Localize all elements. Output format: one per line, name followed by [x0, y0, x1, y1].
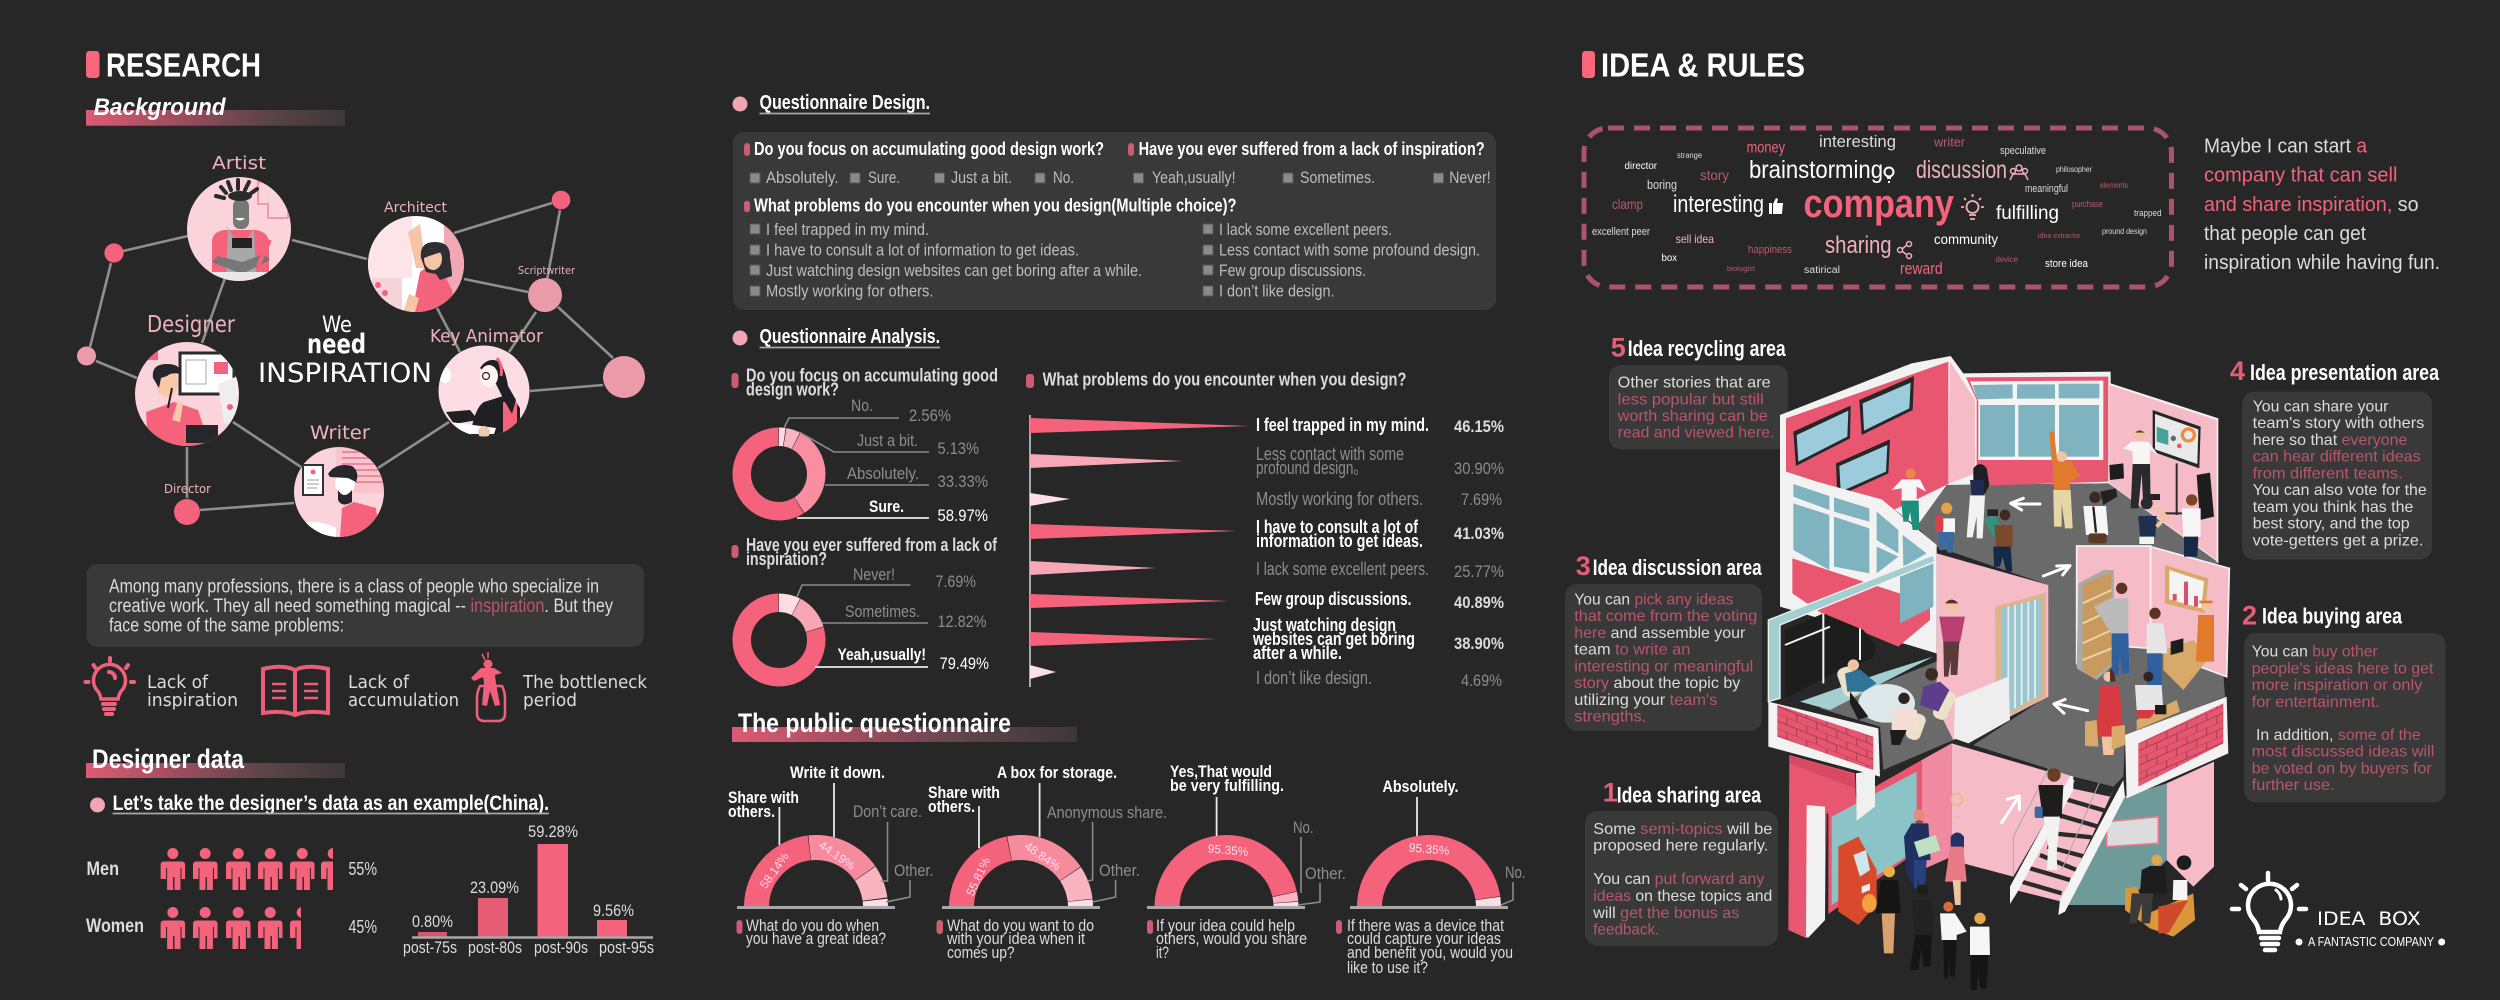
chart: design problems funnel bars: websites can get boring: [1252, 629, 1415, 649]
chart: donut lack of inspiration: Sometimes.: [845, 602, 920, 621]
callout: idea buying area: be voted on by buyers for: [2252, 760, 2432, 778]
icon: thumbs up: [1769, 198, 1783, 214]
people: [1845, 430, 2214, 990]
callout: idea sharing area: Idea sharing area: [1617, 782, 1762, 807]
chart: donut lack of inspiration: Yeah,usually!: [838, 645, 926, 664]
word cloud: director: [1624, 161, 1658, 172]
chart: donut lack of inspiration: inspiration?: [746, 549, 827, 569]
callout: idea presentation area: vote-getters get a prize.: [2253, 532, 2423, 549]
heading: questionnaire design: Questionnaire Design.: [760, 92, 930, 114]
chart: gender pictogram: 45%: [348, 917, 377, 937]
panel: questionnaire questions: Few group discussions.: [1219, 261, 1366, 280]
panel: questionnaire questions: [733, 132, 1496, 310]
word cloud: reward: [1900, 259, 1943, 278]
word cloud: idea extractor: [2038, 233, 2081, 240]
panel: questionnaire questions: Less contact with some profound design.: [1219, 241, 1480, 260]
callout: idea presentation area: You can share your: [2253, 398, 2389, 415]
staircase: [2010, 715, 2125, 915]
icon: light bulb: [86, 658, 134, 714]
label: lack of accumulation: accumulation: [348, 690, 459, 711]
callout: idea recycling area: read and viewed here.: [1618, 425, 1774, 442]
heading: designer data: [86, 744, 345, 778]
heading: idea and rules: IDEA & RULES: [1601, 47, 1805, 84]
callout: idea recycling area: Idea recycling area: [1628, 336, 1786, 361]
callout: idea recycling area: Other stories that are: [1618, 374, 1771, 391]
node: scriptwriter: [528, 278, 562, 312]
word cloud: boring: [1647, 177, 1677, 192]
label: the bottleneck period: The bottleneck: [522, 672, 648, 693]
callout: idea recycling area: less popular but still: [1618, 392, 1764, 408]
center text: we need inspiration: INSPIRATION: [258, 358, 432, 389]
label: designer: Designer: [147, 312, 235, 338]
chart: design problems funnel bars: 7.69%: [1461, 490, 1502, 509]
callout: idea discussion area: interesting or meaningful: [1574, 658, 1753, 675]
panel: questionnaire questions: I feel trapped in my mind.: [766, 220, 929, 239]
chart: design problems funnel bars: 41.03%: [1454, 524, 1504, 543]
callout: idea buying area: most discussed ideas will: [2252, 744, 2434, 761]
label: scriptwriter: Scriptwriter: [518, 264, 575, 277]
callout: idea buying area: [2242, 600, 2446, 802]
label: lack of inspiration: Lack of: [147, 672, 209, 693]
word cloud: strange: [1677, 151, 1703, 160]
callout: idea recycling area: 5: [1611, 333, 1626, 363]
ground floor walls: [1788, 743, 2214, 938]
label: lack of inspiration: [147, 672, 238, 711]
portrait: designer: [135, 342, 239, 446]
word cloud: discussion: [1916, 156, 2007, 184]
panel: questionnaire questions: Just watching design websites can get boring after a while.: [766, 261, 1142, 280]
word cloud: sharing: [1825, 232, 1892, 259]
callout: idea buying area: for entertainment.: [2252, 694, 2380, 711]
panel: questionnaire questions: Sometimes.: [1300, 168, 1375, 187]
chart: donut accumulating design work: 58.97%: [938, 506, 988, 525]
word cloud: community: [1934, 231, 1998, 247]
callout: idea presentation area: team's story with others: [2253, 415, 2424, 432]
chart: would you use a capture device: Absolutely.: [1382, 777, 1458, 796]
chart: what do you do with a great idea: Write it down.: [790, 763, 885, 782]
chart: design problems funnel bars: Just watching design: [1253, 615, 1396, 635]
text block: intro: Among many professions, there is a class of people who specialize in: [109, 577, 599, 598]
right shop room: [2077, 546, 2229, 730]
chart: would you share your idea: [1147, 762, 1346, 966]
word cloud: company: [1804, 182, 1955, 226]
chart: design problems funnel bars: 46.15%: [1454, 417, 1504, 436]
chart: design problems funnel bars: Less contact with some: [1256, 444, 1404, 464]
chart: what do you want to do with your idea: 48.84%: [1022, 839, 1063, 874]
label: the bottleneck period: [522, 672, 648, 711]
heading: designer data: Designer data: [92, 744, 245, 774]
callout: idea discussion area: story about the topic by: [1574, 675, 1740, 692]
left window block and meeting room: [1768, 472, 1993, 770]
label: the bottleneck period: period: [523, 690, 577, 711]
upper floor: [1917, 483, 2225, 787]
panel: questionnaire questions: I have to consult a lot of information to get ideas.: [766, 241, 1079, 260]
callout: idea presentation area: team you think has the: [2253, 499, 2414, 516]
chart: what do you do with a great idea: [728, 763, 934, 966]
chart: age bar chart: post-95s: [599, 938, 654, 957]
word cloud: pround design: [2102, 227, 2147, 236]
chart: would you share your idea: be very fulfilling.: [1170, 776, 1284, 795]
word cloud: store idea: [2045, 258, 2089, 270]
logo: idea box: IDEA BOX: [2317, 908, 2421, 930]
callout: idea presentation area: here so that everyone: [2253, 432, 2407, 449]
chart: design problems funnel bars: What problems do you encounter when you design?: [1043, 370, 1406, 390]
chart: donut lack of inspiration: [732, 535, 998, 677]
chart: age bar chart: 9.56%: [593, 901, 634, 920]
chart: would you use a capture device: If there was a device that: [1347, 916, 1504, 935]
panel: questionnaire questions: Never!: [1449, 168, 1491, 187]
chart: what do you do with a great idea: 44.19%: [816, 838, 858, 873]
chart: would you share your idea: Yes,That would: [1170, 762, 1272, 781]
chart: age bar chart: 0.80%: [412, 912, 453, 931]
icon: book: [263, 667, 328, 715]
chart: design problems funnel bars: I don’t like design.: [1256, 668, 1372, 688]
chart: gender pictogram: Women: [86, 916, 144, 937]
word cloud: brainstorming: [1749, 156, 1883, 184]
label: writer: Writer: [310, 422, 370, 444]
chart: gender pictogram: 55%: [348, 859, 377, 879]
icon: person in a bottle: [471, 652, 505, 721]
chart: donut accumulating design work: [732, 366, 998, 525]
word cloud: trapped: [2134, 208, 2162, 218]
label: key animator: Key Animator: [430, 326, 544, 347]
portrait: key animator: [438, 345, 530, 438]
node: top-left dot: [104, 243, 124, 263]
callout: idea presentation area: best story, and the top: [2253, 516, 2410, 533]
chart: what do you want to do with your idea: with your idea when it: [946, 929, 1085, 948]
label: lack of inspiration: inspiration: [147, 690, 238, 711]
callout: idea buying area: In addition, some of the: [2256, 727, 2421, 744]
chart: donut accumulating design work: 33.33%: [938, 472, 988, 491]
panel: questionnaire questions: Sure.: [868, 168, 900, 187]
callout: idea sharing area: feedback.: [1593, 922, 1659, 939]
callout: idea discussion area: Idea discussion area: [1593, 555, 1762, 580]
chart: what do you want to do with your idea: Other.: [1099, 861, 1140, 880]
chart: donut accumulating design work: Just a bit.: [857, 431, 918, 450]
callout: idea presentation area: Idea presentation area: [2250, 360, 2440, 385]
panel: questionnaire column: [728, 92, 1526, 977]
portrait: architect: [368, 216, 464, 312]
word cloud: fulfilling: [1996, 203, 2059, 224]
meeting table: [1835, 665, 1957, 742]
callout: idea discussion area: utilizing your team's: [1574, 692, 1717, 709]
callout: idea discussion area: strengths.: [1574, 709, 1646, 726]
chart: what do you do with a great idea: Don’t care.: [853, 802, 922, 821]
chart: what do you want to do with your idea: Share with: [928, 783, 1000, 802]
callout: idea buying area: people's ideas here to get: [2252, 660, 2434, 678]
heading: questionnaire analysis: Questionnaire Analysis.: [760, 326, 940, 348]
panel: research column: [77, 47, 654, 957]
chart: what do you want to do with your idea: What do you want to do: [947, 916, 1094, 935]
node: top-right dot: [552, 191, 570, 209]
chart: donut lack of inspiration: Have you ever suffered from a lack of: [746, 535, 998, 555]
word cloud: box: [1662, 253, 1677, 264]
chart: what do you do with a great idea: Share with: [728, 788, 799, 807]
text block: company idea: inspiration while having fun.: [2204, 252, 2440, 274]
callout: idea buying area: Idea buying area: [2262, 604, 2403, 629]
chart: donut lack of inspiration: 7.69%: [936, 572, 976, 591]
chart: would you use a capture device: No.: [1505, 863, 1526, 882]
callout: idea presentation area: [2230, 356, 2440, 560]
word cloud: interesting: [1819, 132, 1896, 151]
chart: donut accumulating design work: Absolutely.: [847, 464, 919, 483]
chart: design problems funnel bars: information to get ideas.: [1256, 531, 1423, 551]
chart: design problems funnel bars: 38.90%: [1454, 634, 1504, 653]
chart: would you share your idea: Other.: [1305, 864, 1346, 883]
callout: idea discussion area: [1565, 551, 1762, 731]
word cloud: story: [1700, 167, 1729, 183]
chart: what do you want to do with your idea: [928, 763, 1167, 966]
callout: idea sharing area: proposed here regularly.: [1593, 838, 1768, 855]
label: artist: Artist: [212, 153, 266, 174]
word cloud: device: [1996, 255, 2019, 264]
chart: would you use a capture device: like to use it?: [1347, 958, 1428, 977]
portrait: writer: [294, 447, 384, 538]
word cloud: philosopher: [2056, 165, 2092, 174]
panel: questionnaire questions: I don’t like design.: [1219, 282, 1334, 301]
pink room with curtain: [1937, 553, 2048, 743]
chart: age bar chart: [403, 822, 654, 957]
illustration: isometric idea building: [1768, 356, 2229, 990]
word cloud: speculative: [2000, 145, 2046, 157]
logo: idea box: [2232, 873, 2445, 950]
chart: what do you want to do with your idea: others.: [928, 797, 975, 816]
panel: questionnaire questions: Mostly working for others.: [766, 282, 934, 301]
chart: design problems funnel bars: 25.77%: [1454, 562, 1504, 581]
chart: what do you want to do with your idea: comes up?: [947, 943, 1015, 962]
chart: would you use a capture device: and benefit you, would you: [1347, 943, 1513, 962]
chart: design problems funnel bars: profound design。: [1256, 458, 1367, 478]
sofa: [2125, 887, 2195, 937]
chart: design problems funnel bars: Mostly working for others.: [1256, 489, 1423, 509]
chart: would you share your idea: others, would you share: [1156, 929, 1307, 948]
back wall silhouette: [1780, 356, 2218, 563]
chart: donut accumulating design work: Do you focus on accumulating good: [746, 366, 998, 386]
chart: what do you want to do with your idea: Anonymous share.: [1047, 803, 1167, 822]
subheading: Background: Background: [94, 94, 227, 121]
heading: RESEARCH: RESEARCH: [106, 47, 261, 84]
callout: idea sharing area: ideas on these topics and: [1593, 888, 1772, 905]
callout: idea discussion area: You can pick any ideas: [1574, 592, 1733, 608]
portrait: artist: [187, 177, 291, 282]
callout: idea discussion area: 3: [1576, 551, 1591, 581]
text block: company idea: and share inspiration, so: [2204, 194, 2419, 216]
chart: donut lack of inspiration: Never!: [853, 565, 895, 584]
chart: what do you do with a great idea: What do you do when: [746, 916, 879, 935]
chart: age bar chart: post-75s: [403, 938, 457, 957]
chart: gender pictogram: [86, 848, 377, 949]
chart: would you share your idea: 95.35%: [1207, 841, 1249, 859]
callout: idea sharing area: Some semi-topics will be: [1593, 821, 1772, 838]
network diagram of creative professions: [77, 153, 645, 538]
back window wall: [1966, 377, 2108, 486]
text block: company idea: [2204, 136, 2440, 274]
icon: mini people: [2010, 165, 2028, 180]
word cloud: elements: [2100, 181, 2128, 190]
label: lack of accumulation: Lack of: [348, 672, 410, 693]
chart: design problems funnel bars: 30.90%: [1454, 459, 1504, 478]
label: lack of accumulation: [348, 672, 459, 711]
callout: idea discussion area: team to write an: [1574, 642, 1690, 659]
red wall with monitors: [1786, 362, 1975, 510]
callout: idea buying area: 2: [2242, 600, 2257, 630]
chart: design problems funnel bars: I have to consult a lot of: [1256, 517, 1419, 537]
word cloud: meaningful: [2025, 183, 2068, 195]
label: director: Director: [164, 482, 211, 496]
chart: would you share your idea: No.: [1293, 818, 1314, 837]
chart: age bar chart: 59.28%: [528, 822, 578, 841]
callout: idea discussion area: here and assemble your: [1574, 625, 1746, 642]
chart: design problems funnel bars: I feel trapped in my mind.: [1256, 415, 1429, 435]
chart: age bar chart: post-90s: [534, 938, 588, 957]
word cloud: purchase: [2072, 199, 2103, 209]
icon: company bulb: [1961, 194, 1984, 219]
text block: company idea: Maybe I can start a: [2204, 136, 2368, 158]
icon: share: [1898, 242, 1912, 258]
text block: intro: face some of the same problems:: [109, 616, 344, 637]
chart: gender pictogram: Men: [86, 859, 119, 880]
node: left dot: [77, 346, 96, 366]
callout: idea buying area: You can buy other: [2252, 644, 2378, 661]
text block: intro: [86, 564, 644, 647]
callout: idea sharing area: You can put forward any: [1593, 871, 1764, 888]
chart: design problems funnel bars: [1026, 370, 1504, 690]
subheading: Background: [86, 94, 345, 126]
word cloud: [1584, 128, 2172, 287]
chart: would you share your idea: If your idea could help: [1156, 916, 1295, 935]
arrows: [2002, 498, 2088, 823]
chart: what do you do with a great idea: Other.: [894, 861, 934, 880]
word cloud: clamp: [1612, 196, 1643, 212]
panel: questionnaire questions: What problems do you encounter when you design(Multiple choice)?: [754, 196, 1236, 216]
panel: questionnaire questions: Just a bit.: [951, 168, 1012, 187]
chart: age bar chart: post-80s: [468, 938, 522, 957]
word cloud: writer: [1933, 135, 1966, 150]
brick walls: [1768, 697, 2228, 798]
text block: intro: creative work. They all need something magical -- inspiration. But they: [109, 596, 613, 617]
icon: mini bulb: [1884, 168, 1894, 182]
callout: idea buying area: more inspiration or only: [2252, 677, 2422, 694]
callout: idea presentation area: 4: [2230, 356, 2245, 386]
callout: idea recycling area: [1609, 333, 1788, 449]
panel: questionnaire questions: No.: [1053, 168, 1074, 187]
chart: donut lack of inspiration: 79.49%: [940, 654, 989, 673]
center text: we need inspiration: We: [322, 313, 352, 338]
word cloud: happiness: [1748, 244, 1792, 256]
chart: would you share your idea: it?: [1156, 943, 1169, 962]
word cloud: sell idea: [1676, 232, 1714, 246]
callout: idea sharing area: [1585, 778, 1778, 946]
label: architect: Architect: [384, 200, 448, 216]
chart: design problems funnel bars: after a while.: [1253, 643, 1342, 663]
chart: design problems funnel bars: I lack some excellent peers.: [1256, 559, 1429, 579]
panel: questionnaire questions: Yeah,usually!: [1152, 168, 1236, 187]
chart: donut lack of inspiration: 12.82%: [938, 612, 986, 631]
logo: idea box: A FANTASTIC COMPANY: [2308, 934, 2434, 949]
chart: donut accumulating design work: design work?: [746, 380, 839, 400]
word cloud: money: [1747, 140, 1785, 157]
subheading: designer data example: Let’s take the designer’s data as an example(China).: [113, 792, 549, 815]
chart: would you use a capture device: 95.35%: [1408, 840, 1450, 858]
heading: the public questionnaire: The public questionnaire: [738, 708, 1011, 738]
word cloud: biologist: [1727, 266, 1755, 273]
right wall with screen: [2109, 385, 2217, 560]
node: right dot: [603, 356, 645, 398]
callout: idea buying area: further use.: [2252, 777, 2335, 794]
callout: idea recycling area: worth sharing can be: [1617, 408, 1768, 425]
word cloud: interesting: [1673, 191, 1764, 218]
callout: idea presentation area: can hear different ideas: [2253, 449, 2421, 466]
chart: donut accumulating design work: 5.13%: [938, 439, 979, 458]
panel: questionnaire questions: Absolutely.: [766, 168, 839, 187]
chart: design problems funnel bars: 4.69%: [1461, 671, 1502, 690]
chart: what do you do with a great idea: you have a great idea?: [746, 929, 886, 948]
panel: questionnaire questions: Do you focus on accumulating good design work?: [754, 139, 1104, 159]
chart: what do you want to do with your idea: A box for storage.: [997, 763, 1117, 782]
atm: [1838, 837, 1877, 925]
word cloud: excellent peer: [1592, 226, 1650, 238]
callout: idea sharing area: will get the bonus as: [1592, 905, 1739, 922]
callout: idea presentation area: You can also vote for the: [2253, 482, 2427, 499]
callout: idea discussion area: that come from the voting: [1574, 608, 1757, 625]
panel: questionnaire questions: I lack some excellent peers.: [1219, 220, 1392, 239]
panel: idea and rules column: [1565, 47, 2446, 990]
word cloud: satirical: [1804, 265, 1840, 276]
chart: would you use a capture device: could capture your ideas: [1347, 929, 1501, 948]
chart: age bar chart: 23.09%: [470, 878, 519, 897]
text block: company idea: that people can get: [2204, 223, 2366, 245]
chart: would you use a capture device: [1336, 777, 1526, 977]
chart: what do you want to do with your idea: 55.81%: [963, 855, 993, 898]
chart: donut accumulating design work: Sure.: [869, 497, 904, 516]
chart: design problems funnel bars: 40.89%: [1454, 593, 1504, 612]
center text: we need inspiration: need: [307, 329, 366, 360]
chart: donut accumulating design work: No.: [851, 396, 873, 415]
callout: idea sharing area: 1: [1603, 778, 1618, 808]
text block: company idea: company that can sell: [2204, 165, 2397, 187]
center text: we need inspiration: [258, 313, 432, 389]
chart: design problems funnel bars: Few group discussions.: [1255, 589, 1412, 609]
panel: questionnaire questions: Have you ever suffered from a lack of inspiration?: [1139, 139, 1485, 159]
chart: what do you do with a great idea: others.: [728, 802, 775, 821]
node: director: [174, 499, 200, 525]
chart: donut accumulating design work: 2.56%: [909, 406, 951, 425]
chart: what do you do with a great idea: 58.14%: [757, 850, 792, 891]
callout: idea presentation area: from different teams.: [2253, 465, 2403, 482]
